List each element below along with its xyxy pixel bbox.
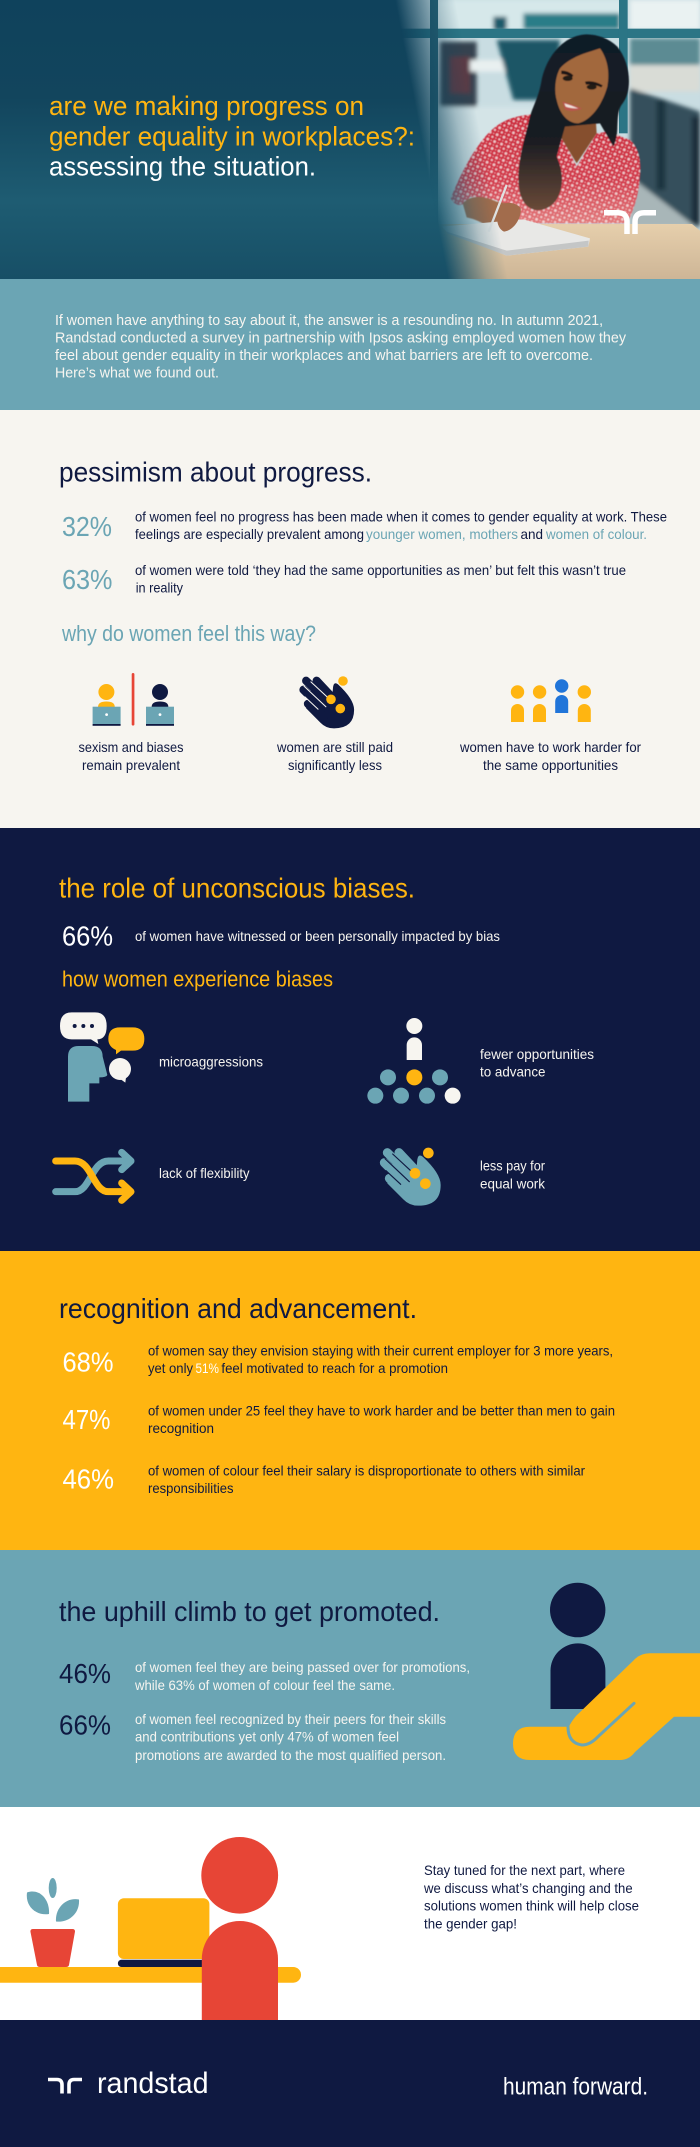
subheading: how women experience biases	[62, 967, 333, 992]
stat 63%: of women were told ‘they had the same opportunities as men’ but felt this wasn’t true	[135, 562, 626, 578]
intro text: If women have anything to say about it, the answer is a resounding no. In autumn 2021,	[55, 312, 603, 329]
icon: teal hand with coins	[384, 1148, 441, 1206]
caption: sexism and biases: remain prevalent	[82, 757, 180, 773]
call to action text: we discuss what’s changing and the	[423, 1880, 633, 1896]
icon: person above a group of circles	[367, 1018, 461, 1104]
stat 47%: recognition	[148, 1420, 214, 1436]
stat 66%	[59, 1709, 446, 1763]
illustration: person at a desk with laptop and plant	[0, 1837, 301, 2020]
logo: randstad wordmark: randstad	[97, 2067, 208, 2100]
stat 46%: while 63% of women of colour feel the same.	[134, 1677, 395, 1693]
caption: work harder	[459, 739, 641, 773]
stat 32%: feelings are especially prevalent among	[135, 526, 364, 542]
call to action text: Stay tuned for the next part, where	[424, 1862, 625, 1878]
stat 32%: younger women, mothers	[366, 526, 518, 542]
logo: randstad mark	[48, 2080, 82, 2094]
call to action text: the gender gap!	[424, 1915, 517, 1931]
label: microaggressions: microaggressions	[159, 1054, 263, 1070]
label: fewer opportunities: to advance	[480, 1064, 546, 1080]
heading: the uphill climb to get promoted.	[59, 1596, 440, 1627]
intro text: Here’s what we found out.	[55, 365, 219, 382]
stat 68%: 68%	[62, 1347, 114, 1378]
stat 68%: yet only	[148, 1360, 193, 1376]
hero title: assessing the situation.	[49, 152, 316, 182]
stat 47%: of women under 25 feel they have to work harder and be better than men to gain	[148, 1403, 615, 1419]
stat 68%: feel motivated to reach for a promotion	[221, 1360, 448, 1376]
hero title: gender equality in workplaces?:	[49, 122, 415, 152]
stat 66%: promotions are awarded to the most qualified person.	[135, 1747, 446, 1763]
stat 46%: 46%	[59, 1658, 111, 1689]
stat 47%: 47%	[62, 1404, 110, 1435]
subheading: why do women feel this way?	[61, 621, 316, 646]
panel: stay tuned	[0, 1807, 700, 2020]
call to action text: solutions women think will help close	[424, 1898, 639, 1914]
hero logo	[604, 213, 656, 234]
stat 63%	[62, 562, 626, 596]
caption: sexism and biases	[78, 739, 184, 773]
label: less pay: equal work	[480, 1175, 546, 1191]
panel: pessimism about progress	[0, 410, 700, 828]
intro text: Randstad conducted a survey in partnership with Ipsos asking employed women how they	[55, 330, 626, 347]
stat 46%: responsibilities	[148, 1480, 234, 1496]
stat 32%: and	[520, 526, 543, 542]
caption: paid less: significantly less	[288, 757, 382, 773]
caption: paid less	[276, 739, 393, 773]
caption: paid less: women are still paid	[276, 739, 393, 755]
stat 32%: women of colour.	[545, 526, 647, 542]
intro text	[55, 312, 626, 382]
stat 32%: of women feel no progress has been made when it comes to gender equality at work. These	[135, 509, 667, 525]
stat 47%	[62, 1403, 615, 1436]
icon: two people at laptops divided	[93, 673, 174, 726]
call to action text	[423, 1862, 639, 1931]
caption: work harder: women have to work harder for	[459, 739, 641, 755]
heading: pessimism about progress.	[59, 457, 372, 488]
hero title: are we making progress on	[49, 91, 364, 121]
stat 46%: of women feel they are being passed over for promotions,	[135, 1659, 470, 1675]
heading: recognition and advancement.	[59, 1293, 417, 1324]
caption: sexism and biases: sexism and biases	[78, 739, 184, 755]
icon: navy hand with coins	[303, 676, 354, 728]
icon: group of people with one raised	[511, 679, 591, 722]
hero title	[49, 91, 415, 182]
stat 66%: of women have witnessed or been personally impacted by bias	[135, 928, 500, 944]
stat 46%: 46%	[62, 1464, 114, 1495]
label: fewer opportunities	[480, 1046, 594, 1080]
label: lack of flexibility: lack of flexibility	[159, 1165, 250, 1181]
stat 66%: 66%	[59, 1709, 111, 1740]
heading: the role of unconscious biases.	[59, 873, 415, 904]
stat 66%: of women feel recognized by their peers for their skills	[135, 1711, 446, 1727]
stat 46%	[59, 1658, 470, 1693]
intro text: feel about gender equality in their workplaces and what barriers are left to overcome.	[55, 347, 593, 364]
panel: introduction	[0, 279, 700, 410]
panel: footer	[0, 2020, 700, 2147]
stat 68%: 51%	[196, 1360, 219, 1376]
panel: hero	[0, 0, 700, 280]
stat 63%: 63%	[62, 564, 112, 595]
stat 68%	[62, 1343, 613, 1378]
illustration: person lifted by a hand	[513, 1583, 700, 1760]
panel: recognition and advancement	[0, 1251, 700, 1550]
stat 32%: 32%	[62, 511, 112, 542]
stat 63%: in reality	[136, 580, 183, 596]
hero photo: woman writing at a table	[390, 0, 700, 280]
stat 32%	[62, 509, 667, 542]
label: fewer opportunities: fewer opportunities	[480, 1046, 594, 1062]
panel: the role of unconscious biases	[0, 828, 700, 1251]
label: less pay: less pay for	[480, 1158, 545, 1174]
icon: head with speech bubbles	[60, 1012, 144, 1102]
stat 68%: of women say they envision staying with their current employer for 3 more years,	[148, 1343, 613, 1359]
caption: work harder: the same opportunities	[483, 757, 618, 773]
stat 46%	[62, 1463, 585, 1496]
label: less pay	[480, 1158, 546, 1191]
stat 66%: 66%	[62, 921, 113, 952]
icon: crossing arrows	[56, 1152, 131, 1200]
panel: the uphill climb to get promoted	[0, 1550, 700, 1807]
stat 46%: of women of colour feel their salary is disproportionate to others with similar	[148, 1463, 585, 1479]
stat 66%: and contributions yet only 47% of women feel	[135, 1729, 399, 1745]
stat 66%	[62, 921, 500, 952]
tagline: human forward.	[503, 2074, 648, 2101]
